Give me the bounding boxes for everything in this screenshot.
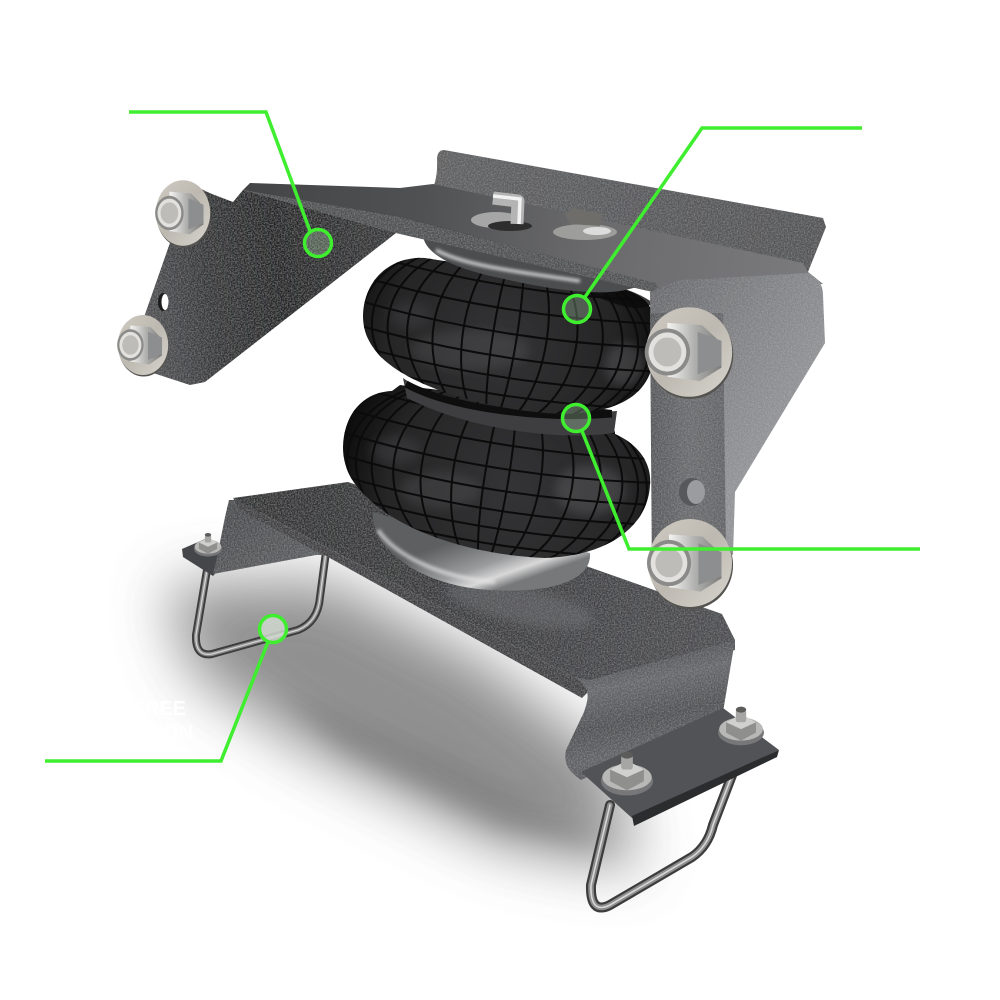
- bracket top surface: [233, 482, 735, 692]
- icon: foot bolt left: [194, 533, 222, 556]
- callout: upper bellow: [564, 128, 862, 322]
- front lip: [233, 498, 590, 698]
- drop shadow: [165, 580, 640, 870]
- callout: U-bolt: [45, 616, 286, 761]
- icon: left U-bolt: [196, 552, 326, 654]
- rear raised flange: [432, 150, 826, 272]
- icon: bolt right upper: [645, 307, 733, 399]
- callout: middle band: [562, 404, 920, 549]
- rubber highlights: [370, 436, 625, 515]
- icon: bolt right lower: [647, 519, 733, 609]
- top silver dome: [423, 224, 650, 292]
- icon: right U-bolt: [591, 770, 734, 908]
- panel: left hanger bracket: [143, 184, 396, 385]
- front edge: [243, 190, 670, 302]
- middle band: [403, 378, 617, 436]
- icon: foot bolt rear: [718, 707, 764, 745]
- panel: lower mounting bracket: [182, 482, 779, 826]
- icon: slot hole: [158, 293, 168, 311]
- ghost text: ion: ION: [157, 722, 193, 744]
- plate surface: [243, 183, 823, 296]
- plate underlay: [243, 190, 670, 302]
- dark recess under lip: [560, 274, 653, 308]
- icon: bolt upper left: [155, 180, 211, 247]
- left foot plate: [182, 539, 228, 576]
- right foot plate: [581, 708, 779, 818]
- ghost text: free: FREE: [133, 698, 186, 720]
- icon: round stud: [679, 478, 705, 506]
- fitting and nuts on upper plate: [471, 196, 617, 240]
- icon: bolt lower left: [117, 315, 169, 376]
- left flange: [213, 500, 332, 574]
- rubber grid: [343, 389, 650, 558]
- reflection of the ring: [443, 572, 597, 638]
- dark gap behind waist: [405, 386, 612, 440]
- rubber highlights: [390, 301, 645, 387]
- upper air spring bellow: [363, 258, 650, 414]
- callout: upper-left bracket: [129, 112, 332, 256]
- panel: upper mounting plate: [243, 150, 826, 302]
- icon: foot bolt front: [601, 752, 653, 796]
- panel: right hanger bracket: [650, 273, 825, 582]
- rubber grid: [363, 258, 650, 414]
- lower air spring bellow: [343, 385, 650, 558]
- right bend face: [565, 640, 735, 780]
- lower silver ring: [373, 512, 590, 591]
- inner strap: [650, 313, 726, 582]
